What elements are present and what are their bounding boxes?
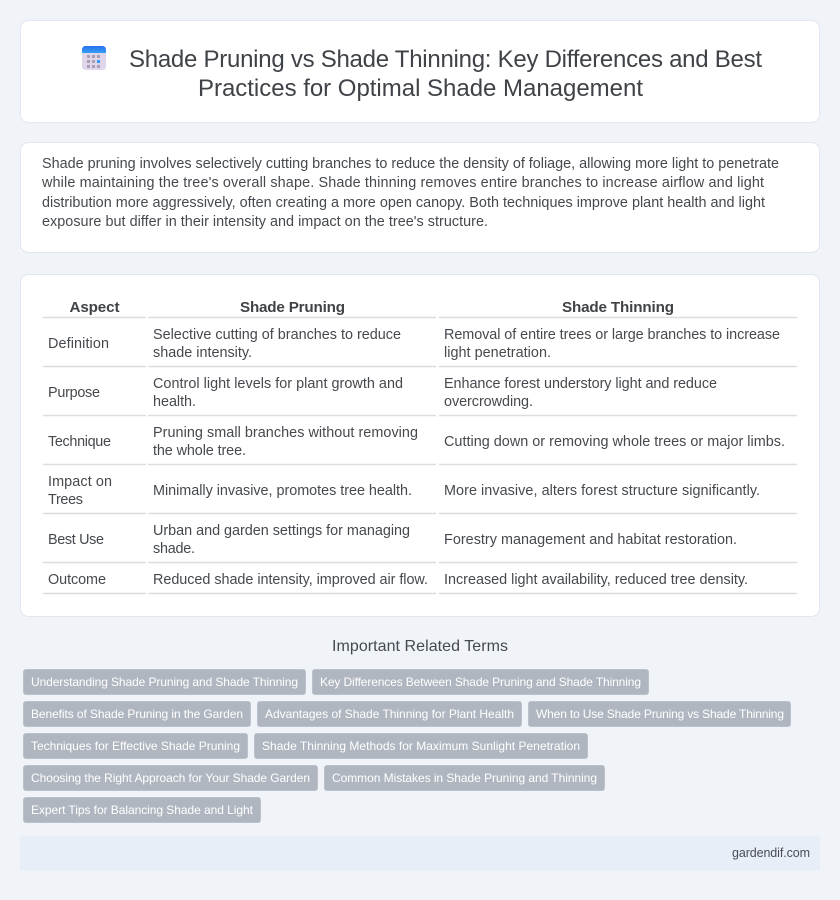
tag (312, 670, 648, 694)
row: impact on trees: More invasive, alters forest structure significantly. (444, 483, 760, 499)
panel: introduction (20, 142, 820, 252)
row: purpose: overcrowding. (444, 394, 533, 410)
tag list (24, 670, 790, 822)
tag: When to Use Shade Pruning vs Shade Thinning (536, 707, 784, 721)
title (129, 46, 762, 102)
tag (528, 702, 790, 726)
row: outcome (48, 572, 748, 588)
tag: Key Differences Between Shade Pruning and Shade Thinning (320, 675, 641, 689)
row: purpose: Purpose (48, 385, 100, 401)
title: Practices for Optimal Shade Management (198, 75, 643, 102)
row: outcome: Outcome (48, 572, 106, 588)
text block: introduction: Shade pruning involves selectively cutting branches to reduce the density of foliage, allowing more light to penetrate (42, 156, 779, 172)
tag: Expert Tips for Balancing Shade and Light (31, 803, 254, 817)
row: purpose: Control light levels for plant growth and (153, 376, 403, 392)
tag (24, 702, 250, 726)
row: definition: shade intensity. (153, 345, 252, 361)
row: definition: Selective cutting of branches to reduce (153, 327, 401, 343)
tag: Techniques for Effective Shade Pruning (31, 739, 240, 753)
tag: Understanding Shade Pruning and Shade Thinning (31, 675, 298, 689)
tag: Shade Thinning Methods for Maximum Sunlight Penetration (262, 739, 580, 753)
row: outcome: Reduced shade intensity, improved air flow. (153, 572, 428, 588)
tag (24, 734, 248, 758)
tag: Benefits of Shade Pruning in the Garden (31, 707, 243, 721)
row: best use: shade. (153, 541, 195, 557)
row: technique: Technique (48, 434, 111, 450)
table header (70, 299, 674, 316)
heading: important related terms: Important Related Terms (332, 638, 508, 655)
footer: gardendif.com (732, 846, 810, 860)
tag (24, 670, 306, 694)
table header: Shade Pruning (240, 299, 345, 316)
text block: introduction: while maintaining the tree's overall shape. Shade thinning removes entire branches to increase airflow and light (41, 175, 764, 191)
row: purpose: health. (153, 394, 196, 410)
row: best use: Urban and garden settings for managing (153, 523, 410, 539)
row: impact on trees (48, 474, 760, 508)
panel: comparison table (20, 274, 820, 616)
text block: introduction (41, 156, 779, 230)
tag: Advantages of Shade Thinning for Plant Health (265, 707, 514, 721)
row: best use: Best Use (48, 532, 104, 548)
row: impact on trees: Trees (48, 492, 83, 508)
row: best use (48, 523, 737, 557)
panel: header (20, 20, 820, 122)
row: definition (48, 327, 780, 361)
row: definition: Removal of entire trees or large branches to increase (444, 327, 780, 343)
tag (254, 734, 588, 758)
row: definition: light penetration. (444, 345, 551, 361)
row: definition: Definition (48, 336, 109, 352)
row: outcome: Increased light availability, reduced tree density. (444, 572, 748, 588)
tag: Choosing the Right Approach for Your Shade Garden (31, 771, 310, 785)
tag: Common Mistakes in Shade Pruning and Thinning (332, 771, 597, 785)
row: impact on trees: Minimally invasive, promotes tree health. (153, 483, 412, 499)
row: best use: Forestry management and habitat restoration. (444, 532, 737, 548)
table header: Aspect (70, 299, 120, 316)
row: technique: the whole tree. (153, 443, 246, 459)
tag (24, 766, 318, 790)
row: impact on trees: Impact on (48, 474, 112, 490)
text block: introduction: exposure but differ in their intensity and impact on the tree's structure. (42, 214, 488, 230)
row: technique: Pruning small branches without removing (153, 425, 418, 441)
table header: Shade Thinning (562, 299, 674, 316)
row: purpose (48, 376, 717, 410)
tag (258, 702, 522, 726)
row: technique: Cutting down or removing whole trees or major limbs. (444, 434, 785, 450)
row: technique (48, 425, 785, 459)
tag (324, 766, 604, 790)
tag (24, 798, 260, 822)
text block: introduction: distribution more aggressively, often creating a more open canopy. Both techniques improve plant health and light (42, 195, 765, 211)
footer (20, 836, 820, 870)
title: Shade Pruning vs Shade Thinning: Key Differences and Best (129, 46, 762, 73)
icon: calendar (82, 46, 106, 70)
row: purpose: Enhance forest understory light and reduce (444, 376, 717, 392)
